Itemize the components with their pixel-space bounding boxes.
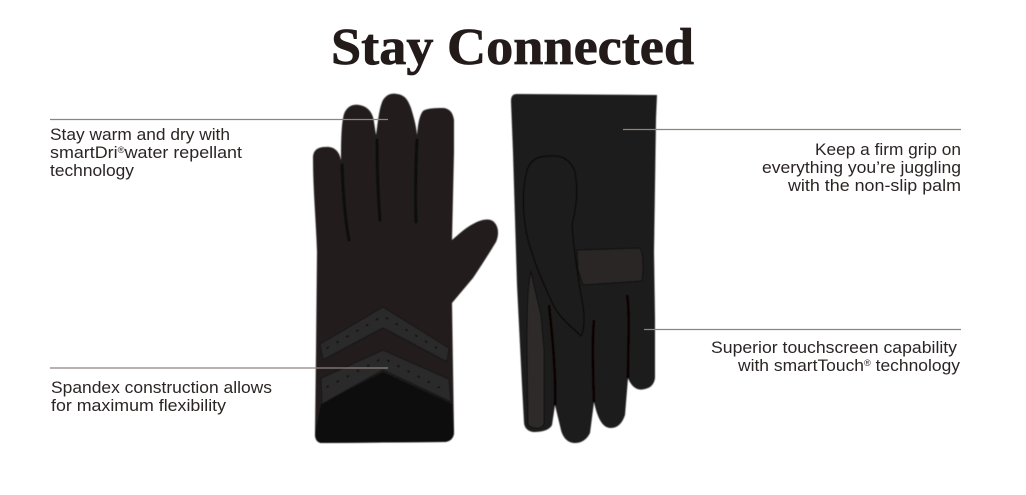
text: water repellant: ® <box>118 145 125 155</box>
text: water repellant: smartDri <box>50 143 114 162</box>
glove body <box>313 94 498 443</box>
text: spandex: for maximum flexibility <box>51 396 227 415</box>
text: water repellant: Stay warm and dry with <box>50 125 230 144</box>
text: grip: with the non-slip palm <box>787 176 961 195</box>
right glove: palm <box>511 94 657 443</box>
perforation dots <box>327 316 446 391</box>
text: spandex <box>51 378 272 415</box>
text: touchscreen: with smartTouch <box>738 356 861 375</box>
text: grip <box>762 140 961 195</box>
upper chevron trim <box>320 307 449 362</box>
ribbed cuff <box>315 372 454 443</box>
glove body <box>511 94 657 443</box>
callout line: spandex <box>50 367 388 369</box>
text: grip: Keep a firm grip on <box>815 140 961 159</box>
text: water repellant: technology <box>50 161 135 180</box>
left glove: back of hand <box>313 94 498 443</box>
text: touchscreen: ® <box>864 358 871 368</box>
callout line: touchscreen <box>644 328 961 330</box>
lower chevron trim <box>321 350 451 404</box>
text: grip: everything you’re juggling <box>762 158 961 177</box>
title: Stay Connected <box>331 19 694 76</box>
text: touchscreen <box>711 338 961 375</box>
text: touchscreen: technology <box>871 356 961 375</box>
palm touch patch <box>577 248 643 285</box>
thumb <box>523 156 584 336</box>
text: water repellant <box>50 125 242 180</box>
touchscreen index finger patch <box>527 272 544 428</box>
callout line: smartDri <box>50 118 388 120</box>
text: spandex: Spandex construction allows <box>51 378 272 397</box>
callout line: grip <box>623 128 961 130</box>
text: water repellant: water repellant <box>124 143 242 162</box>
finger seams <box>549 295 629 405</box>
text: touchscreen: Superior touchscreen capability <box>711 338 958 357</box>
finger seams <box>342 140 417 240</box>
